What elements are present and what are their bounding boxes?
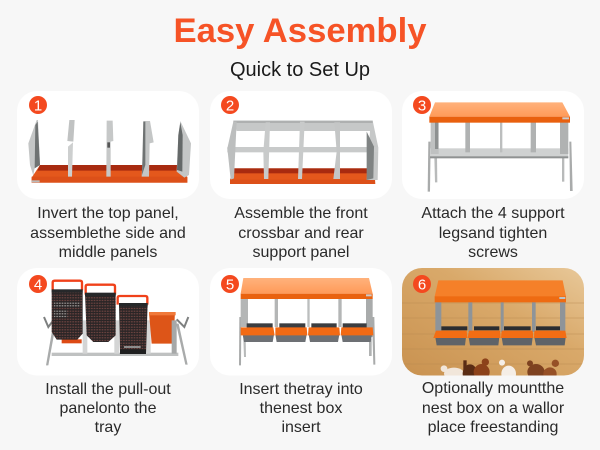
badge 6: 6 xyxy=(418,276,426,294)
panel: step 1 xyxy=(17,91,199,199)
panel: step 6 wall-mounted scene xyxy=(402,268,584,383)
subtitle: Quick to Set Up xyxy=(230,59,370,81)
title: Easy Assembly xyxy=(174,12,427,50)
badge 1: 1 xyxy=(34,98,42,114)
badge 3 xyxy=(413,96,431,114)
caption 4: Install the pull-out xyxy=(45,381,171,398)
caption 5: thenest box xyxy=(260,400,342,417)
badge 4 xyxy=(29,275,47,294)
illustration: nest box with trays inserted xyxy=(239,278,375,365)
caption 1: middle panels xyxy=(59,244,157,261)
caption 3: legsand tighten xyxy=(439,225,547,242)
panel: step 4 xyxy=(17,268,199,376)
illustration: chickens xyxy=(440,358,559,376)
badge 6 xyxy=(413,275,431,294)
caption 5: insert xyxy=(281,419,321,436)
caption 6: place freestanding xyxy=(428,419,558,436)
panel: step 3 xyxy=(402,91,584,199)
caption 2: Assemble the front xyxy=(234,205,368,222)
caption 4: tray xyxy=(95,419,121,436)
caption 1: assemblethe side and xyxy=(30,225,186,242)
badge 3: 3 xyxy=(418,98,426,114)
illustration: pull-out panels on tray xyxy=(44,281,188,365)
caption 2: support panel xyxy=(253,244,349,261)
badge 2: 2 xyxy=(226,98,234,114)
caption 1: Invert the top panel, xyxy=(37,205,179,222)
caption 6: Optionally mountthe xyxy=(422,380,564,397)
caption 3: screws xyxy=(468,244,518,261)
badge 1 xyxy=(29,96,47,114)
caption 4: panelonto the xyxy=(60,400,157,417)
panel: step 5 xyxy=(210,268,392,376)
badge 2 xyxy=(221,96,239,114)
caption 6: nest box on a wallor xyxy=(422,400,565,417)
caption 5: Insert thetray into xyxy=(239,381,363,398)
illustration: mounted nest box xyxy=(433,280,567,345)
panel: step 2 xyxy=(210,91,392,199)
caption 2: crossbar and rear xyxy=(238,225,364,242)
illustration: bottom tray with upright panels xyxy=(28,120,191,183)
badge 5 xyxy=(221,275,239,294)
caption 3: Attach the 4 support xyxy=(421,205,565,222)
badge 4: 4 xyxy=(34,276,42,294)
illustration: frame with crossbar and support panel xyxy=(227,121,378,184)
illustration: nest box with roof and legs xyxy=(428,102,573,192)
badge 5: 5 xyxy=(226,276,234,294)
